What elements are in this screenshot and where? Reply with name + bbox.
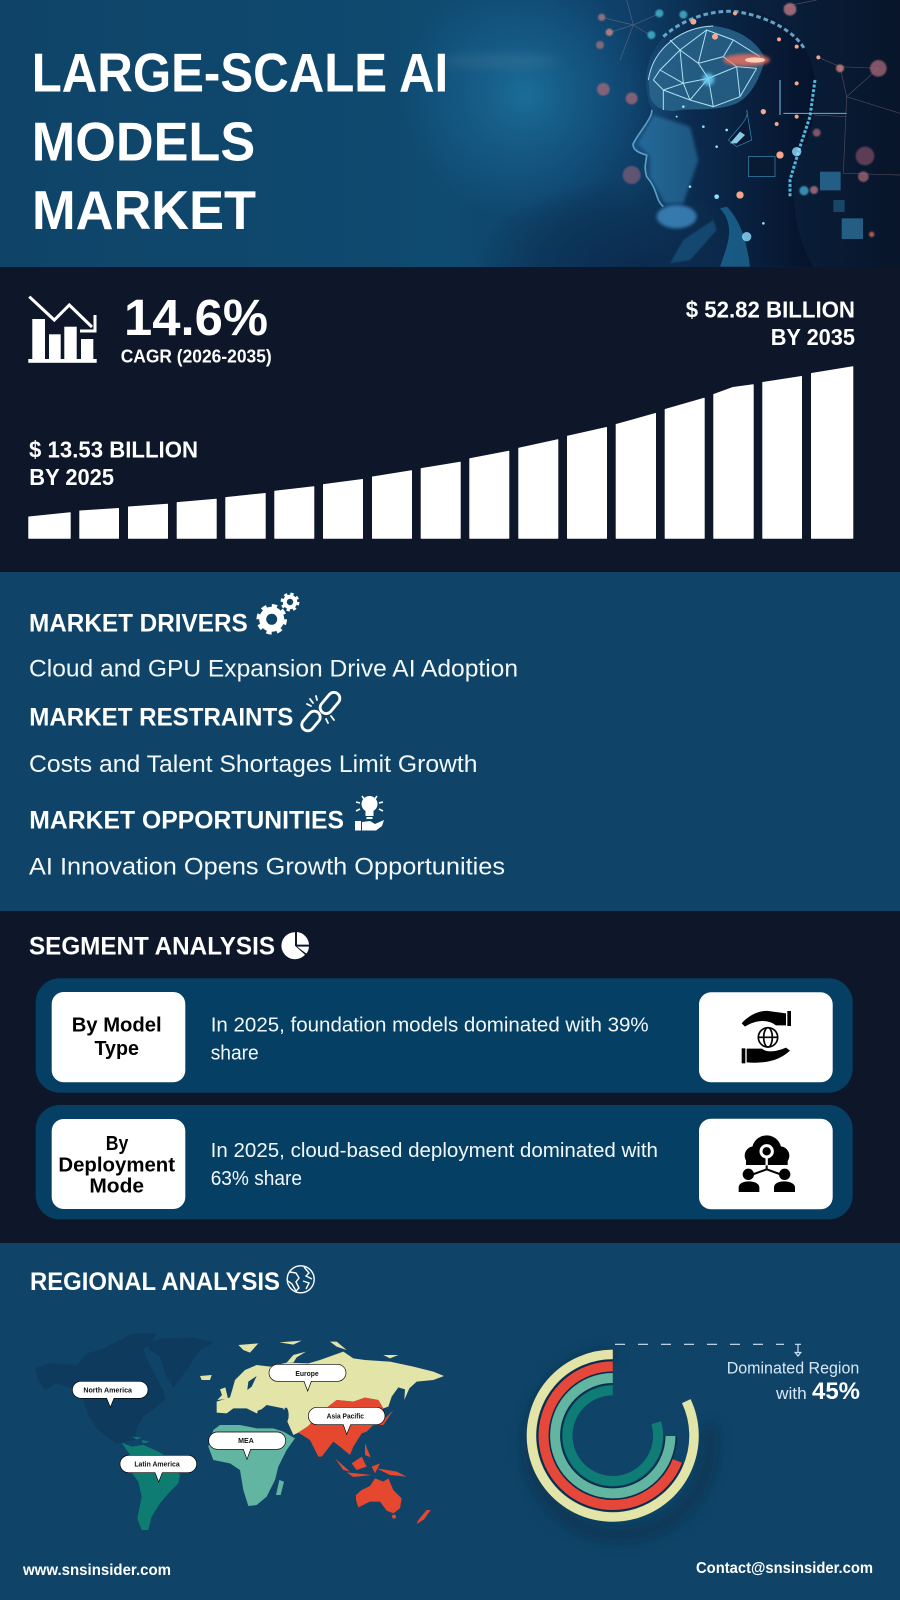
icon: cloud network xyxy=(699,1119,833,1209)
title: MARKET xyxy=(32,179,256,241)
callout: dominated region: Dominated Region xyxy=(727,1358,859,1377)
world map xyxy=(35,1333,444,1530)
card: by deployment mode xyxy=(36,1105,853,1219)
callout: Asia Pacific xyxy=(308,1407,385,1434)
panel: header xyxy=(0,0,900,358)
CAGR value: 14.6% xyxy=(124,289,268,346)
icon: gears xyxy=(258,594,298,633)
heading: market restraints: MARKET RESTRAINTS xyxy=(29,703,293,731)
donut chart xyxy=(530,1354,710,1535)
region: Asia Pacific xyxy=(298,1398,431,1524)
region: Latin America xyxy=(122,1437,180,1530)
label card: by model type: By Model xyxy=(72,1014,162,1037)
label card: by deployment mode: Deployment xyxy=(58,1154,175,1177)
label card: by deployment mode: By xyxy=(106,1132,129,1155)
title xyxy=(32,42,448,241)
callout: Latin America: Latin America xyxy=(134,1461,180,1468)
CAGR label: CAGR (2026-2035) xyxy=(121,347,272,367)
icon: broken chain xyxy=(299,690,342,733)
text: restraints: Costs and Talent Shortages Limit Growth xyxy=(29,751,477,778)
end value label: BY 2035 xyxy=(771,324,855,350)
region: Middle East and Africa xyxy=(208,1425,295,1506)
panel: market size xyxy=(0,267,900,572)
text: drivers: Cloud and GPU Expansion Drive AI Adoption xyxy=(29,656,518,683)
description: In 2025, foundation models dominated with 39% xyxy=(211,1014,649,1037)
region: North America xyxy=(35,1333,213,1443)
bar chart xyxy=(29,367,853,538)
callout: North America xyxy=(72,1381,148,1407)
icon: lightbulb on hand xyxy=(355,796,384,830)
callout: Europe xyxy=(269,1364,346,1391)
end value label xyxy=(686,297,855,350)
callout: North America: North America xyxy=(83,1387,132,1394)
heading: market opportunities: MARKET OPPORTUNITIES xyxy=(29,807,344,835)
panel: segment analysis xyxy=(0,911,900,1244)
icon: chart with arrow xyxy=(28,297,97,363)
description xyxy=(211,1014,649,1064)
heading: regional analysis: REGIONAL ANALYSIS xyxy=(30,1268,280,1296)
icon: globe xyxy=(287,1266,314,1293)
region: Europe xyxy=(200,1341,444,1435)
callout: MEA xyxy=(209,1432,286,1459)
description: 63% share xyxy=(211,1167,302,1190)
footer: contact: Contact@snsinsider.com xyxy=(696,1560,873,1577)
heading: segment analysis: SEGMENT ANALYSIS xyxy=(29,932,275,960)
callout: Latin America xyxy=(120,1455,197,1482)
panel: market dynamics xyxy=(0,572,900,911)
label card: by model type: Type xyxy=(94,1037,139,1060)
text: opportunities: AI Innovation Opens Growth Opportunities xyxy=(29,853,505,880)
icon: pie chart xyxy=(281,932,309,959)
heading: market drivers: MARKET DRIVERS xyxy=(29,609,248,637)
description: share xyxy=(211,1041,259,1064)
description xyxy=(211,1139,658,1190)
dashed pointer arrow xyxy=(615,1344,801,1356)
callout: MEA: MEA xyxy=(238,1438,254,1445)
callout: Asia Pacific: Asia Pacific xyxy=(327,1414,364,1421)
callout: dominated region: 45% xyxy=(812,1378,860,1405)
callout: dominated region: with xyxy=(775,1384,807,1403)
end value label: $ 52.82 BILLION xyxy=(686,297,855,323)
card: by model type xyxy=(36,978,853,1093)
callout: dominated region xyxy=(727,1358,860,1405)
image: AI head with glowing brain xyxy=(596,0,900,267)
start value label xyxy=(29,437,198,490)
footer: website: www.snsinsider.com xyxy=(22,1562,171,1579)
start value label: BY 2025 xyxy=(29,464,114,490)
label card: by deployment mode xyxy=(52,1119,185,1209)
label card: by model type xyxy=(52,992,185,1082)
panel: regional analysis xyxy=(0,1243,900,1600)
title: LARGE-SCALE AI xyxy=(32,42,448,104)
title: MODELS xyxy=(32,110,255,172)
callout: Europe: Europe xyxy=(295,1371,319,1378)
icon: hands holding globe xyxy=(699,992,833,1082)
description: In 2025, cloud-based deployment dominated with xyxy=(211,1139,658,1162)
label card: by deployment mode: Mode xyxy=(89,1174,144,1197)
start value label: $ 13.53 BILLION xyxy=(29,437,198,463)
